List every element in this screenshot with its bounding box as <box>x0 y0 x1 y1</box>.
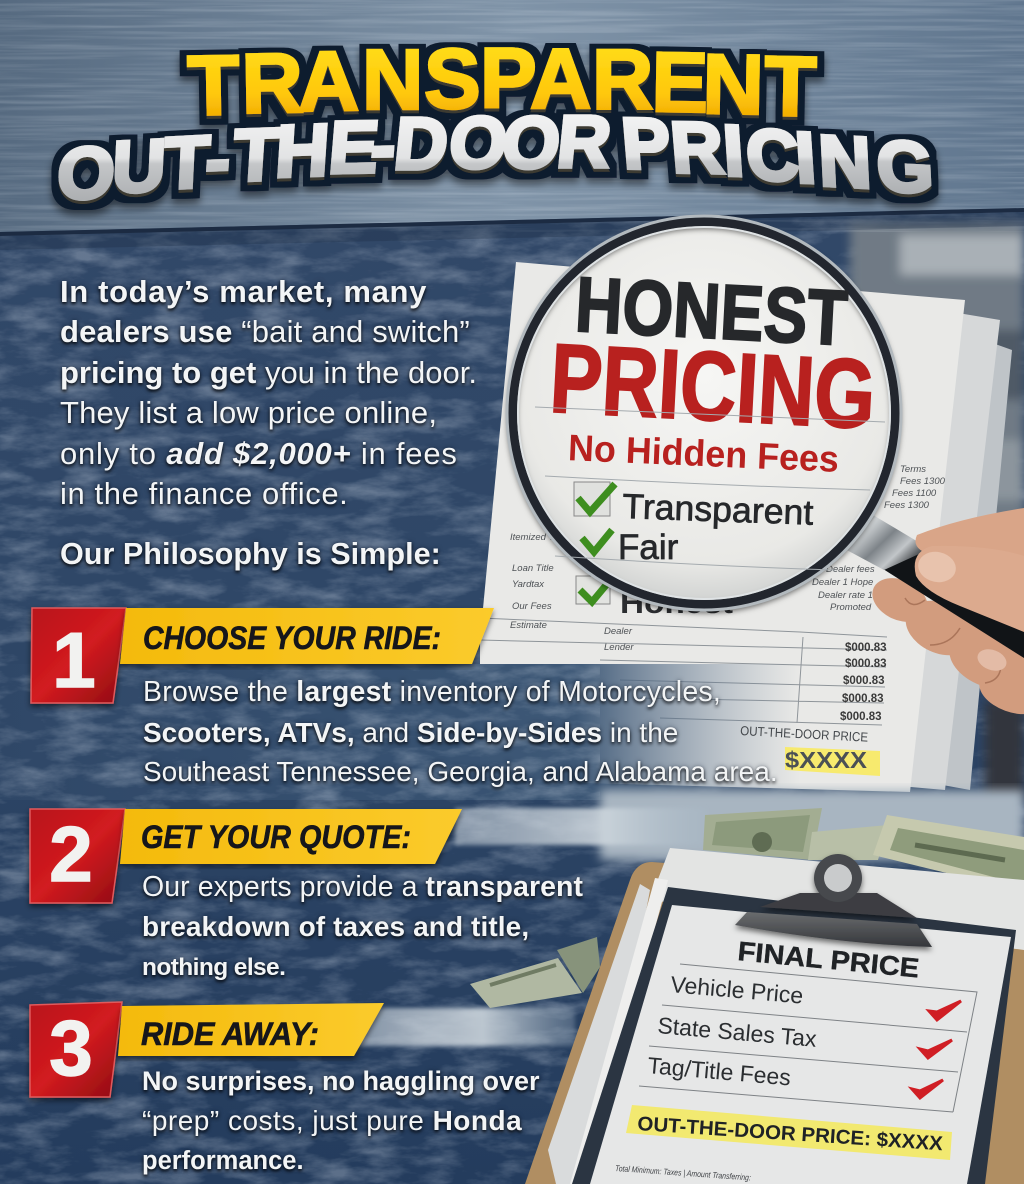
panel: header band <box>0 0 1024 250</box>
row: tag and title fees: Tag/Title Fees <box>647 1052 792 1090</box>
lens: transparent check: Transparent <box>622 487 814 533</box>
invoice small print: Lender <box>604 642 634 653</box>
step 2 text: Our experts provide a transparent <box>142 871 583 903</box>
icon: number 3: 3 <box>49 1004 93 1092</box>
lens: honest: HONEST <box>573 260 850 362</box>
icon: magnifying glass <box>507 216 1024 722</box>
step 3 text <box>140 1066 541 1178</box>
philosophy subheading: Our Philosophy is Simple: <box>60 537 441 571</box>
invoice small print: Dealer 1 Hope <box>812 577 873 588</box>
lower fingers <box>865 570 1024 722</box>
step 2 text <box>140 871 585 984</box>
intro text: In today’s market, many <box>60 274 427 309</box>
intro text <box>58 274 477 511</box>
invoice small print <box>510 464 946 653</box>
step 2 text: breakdown of taxes and title, <box>142 911 529 942</box>
icon: hand holding handle <box>905 508 1024 683</box>
lens: fair check: Fair <box>618 528 679 567</box>
invoice small print: Dealer rate 1018 <box>818 590 889 601</box>
lens: no hidden fees: No Hidden Fees <box>567 427 840 480</box>
invoice amounts: $000.83 <box>840 711 882 723</box>
intro text: in the finance office. <box>60 476 348 511</box>
row: vehicle price: Vehicle Price <box>670 971 804 1009</box>
invoice amounts: $000.83 <box>845 658 887 670</box>
step 3 text: No surprises, no haggling over <box>142 1066 540 1096</box>
callout: out-the-door price <box>626 1105 952 1160</box>
invoice small print: Estimate <box>510 620 547 631</box>
panel: sky and cash backdrop <box>345 790 1024 1046</box>
step 1 text: Scooters, ATVs, and Side-by-Sides in the <box>143 716 678 748</box>
step 3 text: performance. <box>142 1147 304 1175</box>
index finger <box>915 508 1024 565</box>
title <box>51 31 939 216</box>
row: vehicle price <box>662 971 967 1032</box>
step 2 heading: GET YOUR QUOTE: <box>141 819 411 855</box>
panel: blurred dealership backdrop <box>850 222 1024 800</box>
out-the-door price tag: OUT-THE-DOOR PRICE <box>740 723 869 745</box>
step 2 banner <box>30 809 462 903</box>
invoice small print: Itemized Totals <box>510 532 574 543</box>
panel: fade behind step text <box>0 664 800 800</box>
invoice small print: Fees 1100 <box>892 488 937 499</box>
step 1 banner <box>31 608 494 704</box>
lower checkbox: honest: Honest <box>620 587 733 620</box>
invoice table lines <box>480 618 887 725</box>
panel: honest pricing documents <box>480 262 1012 792</box>
step 3 text: “prep” costs, just pure Honda <box>142 1105 522 1136</box>
step 1 text: Southeast Tennessee, Georgia, and Alabama area. <box>143 756 778 787</box>
icon: number 2 <box>30 809 125 903</box>
row: state sales tax <box>649 1012 958 1072</box>
step 1 heading <box>120 608 494 664</box>
step 3 banner <box>30 1002 384 1097</box>
invoice small print: Dealer <box>604 626 633 637</box>
icon: number 2: 2 <box>49 810 93 898</box>
step 1 text: Browse the largest inventory of Motorcycles, <box>143 676 721 708</box>
callout: out-the-door price: OUT-THE-DOOR PRICE: $XXXX <box>637 1113 944 1155</box>
lens rim <box>512 221 896 605</box>
invoice small print: Yardtax <box>512 579 545 590</box>
lower checkbox: honest <box>576 576 733 620</box>
thumb <box>915 546 1024 632</box>
invoice small print: Loan Title <box>512 563 554 574</box>
row: tag and title fees <box>639 1052 953 1112</box>
intro text: They list a low price online, <box>60 395 437 430</box>
panel: final price clipboard <box>525 848 1024 1184</box>
out-the-door price tag <box>740 723 880 776</box>
invoice small print: Promoted <box>830 602 872 613</box>
icon: number 1 <box>31 608 126 704</box>
invoice small print: Dealer fees <box>826 564 875 575</box>
intro text: pricing to get you in the door. <box>60 355 477 390</box>
step 2 text: nothing else. <box>142 954 285 981</box>
heading: final price: FINAL PRICE <box>736 936 920 983</box>
invoice small print: Fees 1300 <box>884 500 930 511</box>
icon: number 3 <box>30 1002 122 1097</box>
magnifier handle <box>880 547 1024 658</box>
step 3 heading: RIDE AWAY: <box>141 1016 319 1052</box>
out-the-door price tag: $XXXX <box>785 747 868 773</box>
invoice small print: Terms <box>900 464 926 475</box>
title line 2 right: PRICING <box>617 104 939 209</box>
invoice amounts <box>840 642 887 723</box>
title line 1: TRANSPARENT <box>187 31 817 135</box>
step 1 text <box>142 676 778 792</box>
invoice amounts: $000.83 <box>845 642 887 654</box>
row: state sales tax: State Sales Tax <box>657 1012 818 1052</box>
icon: number 1: 1 <box>52 616 96 704</box>
invoice small print: Fees 1300 <box>900 476 946 487</box>
title line 2 left: OUT-THE-DOOR <box>51 100 615 216</box>
intro text: dealers use “bait and switch” <box>60 314 470 349</box>
step 3 heading <box>118 1003 384 1056</box>
invoice amounts: $000.83 <box>842 693 884 705</box>
step 1 heading: CHOOSE YOUR RIDE: <box>143 620 441 656</box>
step 2 heading <box>120 809 462 864</box>
intro text: only to add $2,000+ in fees <box>60 436 458 471</box>
invoice amounts: $000.83 <box>843 675 885 687</box>
lens: fair check <box>582 528 679 567</box>
invoice small print: Our Fees <box>512 601 552 612</box>
lens: pricing: PRICING <box>548 323 878 449</box>
clipboard clip <box>735 854 932 947</box>
